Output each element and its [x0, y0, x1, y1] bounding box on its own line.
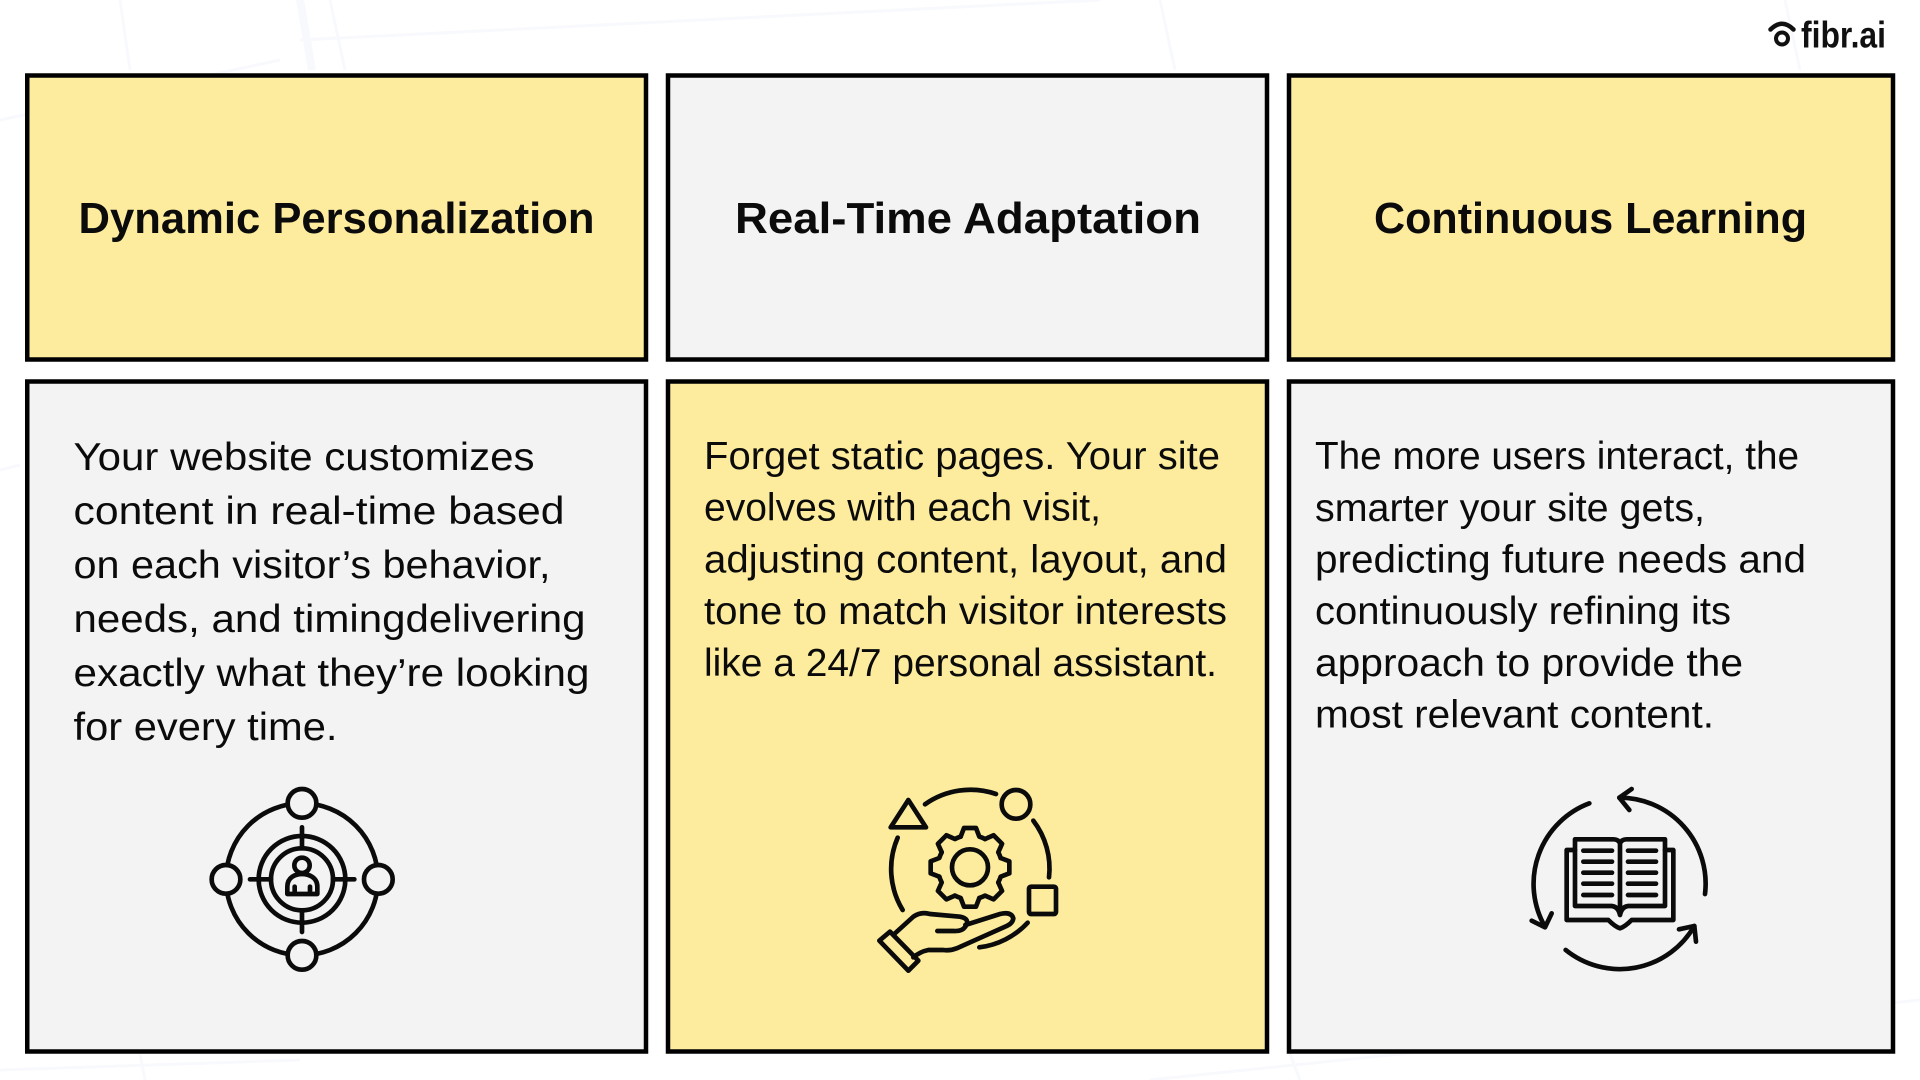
text block: continuous learning description: most relevant content.: [1315, 694, 1714, 736]
icon: open book with cycle arrows: [1532, 789, 1706, 969]
text block: real-time adaptation description: [704, 435, 1227, 685]
heading: Real-Time Adaptation: Real-Time Adaptation: [735, 194, 1201, 243]
text block: dynamic personalization description: on each visitor’s behavior,: [74, 544, 550, 587]
logo: fibr.ai: fibr.ai: [1801, 14, 1886, 56]
text block: continuous learning description: smarter your site gets,: [1315, 487, 1705, 530]
text block: dynamic personalization description: exactly what they’re looking: [74, 652, 590, 695]
text block: continuous learning description: approach to provide the: [1315, 642, 1743, 685]
text block: real-time adaptation description: like a 24/7 personal assistant.: [704, 642, 1217, 685]
heading: Dynamic Personalization: Dynamic Personalization: [78, 194, 594, 243]
text block: dynamic personalization description: needs, and timingdelivering: [74, 598, 586, 641]
icon: target with person: [212, 789, 393, 970]
icon: hand holding gear and shapes: [879, 790, 1056, 971]
text block: real-time adaptation description: adjusting content, layout, and: [704, 538, 1227, 582]
text block: real-time adaptation description: Forget static pages. Your site: [704, 435, 1220, 478]
text block: real-time adaptation description: tone to match visitor interests: [704, 590, 1227, 633]
text block: continuous learning description: The more users interact, the: [1315, 435, 1799, 478]
text block: dynamic personalization description: for every time.: [74, 706, 338, 749]
text block: dynamic personalization description: content in real-time based: [74, 490, 564, 533]
text block: continuous learning description: [1315, 435, 1806, 736]
panel: Real-Time Adaptation heading: [668, 76, 1267, 360]
text block: continuous learning description: continuously refining its: [1315, 590, 1731, 633]
logo: fibr.ai: [1770, 14, 1886, 56]
text block: continuous learning description: predicting future needs and: [1315, 538, 1806, 582]
panel: Dynamic Personalization description: [27, 382, 646, 1052]
text block: dynamic personalization description: [74, 436, 590, 749]
panel: Real-Time Adaptation description: [668, 382, 1267, 1052]
panel: Dynamic Personalization heading: [27, 76, 646, 360]
heading: Continuous Learning: Continuous Learning: [1374, 194, 1807, 243]
panel: Continuous Learning heading: [1289, 76, 1893, 360]
text block: dynamic personalization description: Your website customizes: [74, 436, 534, 479]
panel: Continuous Learning description: [1289, 382, 1893, 1052]
text block: real-time adaptation description: evolves with each visit,: [704, 486, 1101, 530]
